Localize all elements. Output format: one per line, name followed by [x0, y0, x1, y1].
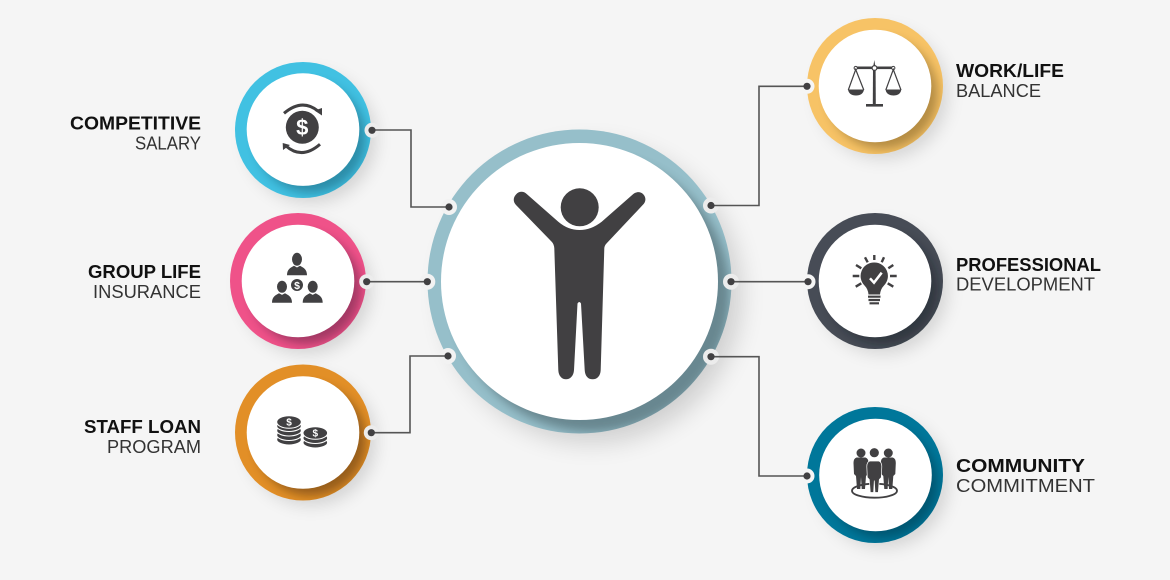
icon: light bulb with check [853, 255, 897, 303]
label: professional development: DEVELOPMENT [956, 274, 1095, 294]
icon: coin stacks [277, 416, 328, 448]
label: community commitment: COMMUNITY [956, 455, 1086, 476]
icon: coin stacks: $ [313, 428, 319, 440]
icon: coin stacks: $ [286, 418, 292, 428]
connector: professional development [731, 281, 808, 283]
icon: dollar with circular arrows: $ [296, 115, 308, 140]
panel: staff loan program circle [235, 364, 375, 504]
connector dots [363, 83, 812, 480]
label: work life balance [956, 60, 1064, 101]
connector: work life balance [711, 86, 807, 206]
connector: competitive salary [372, 130, 449, 207]
label: staff loan program [84, 416, 201, 457]
icon: balance scales [848, 60, 901, 107]
central panel: person [428, 130, 740, 442]
panel: group life insurance circle [230, 213, 370, 353]
label: group life insurance: INSURANCE [93, 281, 201, 302]
label: competitive salary: COMPETITIVE [70, 112, 201, 134]
label: professional development [956, 254, 1101, 294]
panel: competitive salary circle [235, 62, 375, 202]
label: work life balance: BALANCE [956, 80, 1041, 101]
icon: person with raised arms [514, 188, 645, 379]
label: staff loan program: STAFF LOAN [84, 416, 201, 437]
label: group life insurance: GROUP LIFE [88, 261, 201, 282]
connector: group life insurance [367, 281, 427, 283]
label: community commitment: COMMITMENT [956, 475, 1095, 496]
label: competitive salary: SALARY [135, 132, 201, 154]
label: community commitment [956, 455, 1095, 496]
icon: people with dollar: $ [294, 280, 300, 292]
connector: staff loan program [371, 356, 448, 433]
label: competitive salary [70, 112, 201, 154]
label: work life balance: WORK/LIFE [956, 60, 1064, 81]
panel: professional development circle [807, 213, 947, 353]
connector: community commitment [711, 357, 807, 476]
panel: community commitment circle [807, 407, 948, 547]
icon: team in a circle [852, 448, 897, 498]
label: group life insurance [88, 261, 201, 302]
label: professional development: PROFESSIONAL [956, 254, 1101, 275]
label: staff loan program: PROGRAM [107, 436, 201, 457]
connector halos [359, 79, 816, 484]
panel: work life balance circle [807, 18, 947, 158]
